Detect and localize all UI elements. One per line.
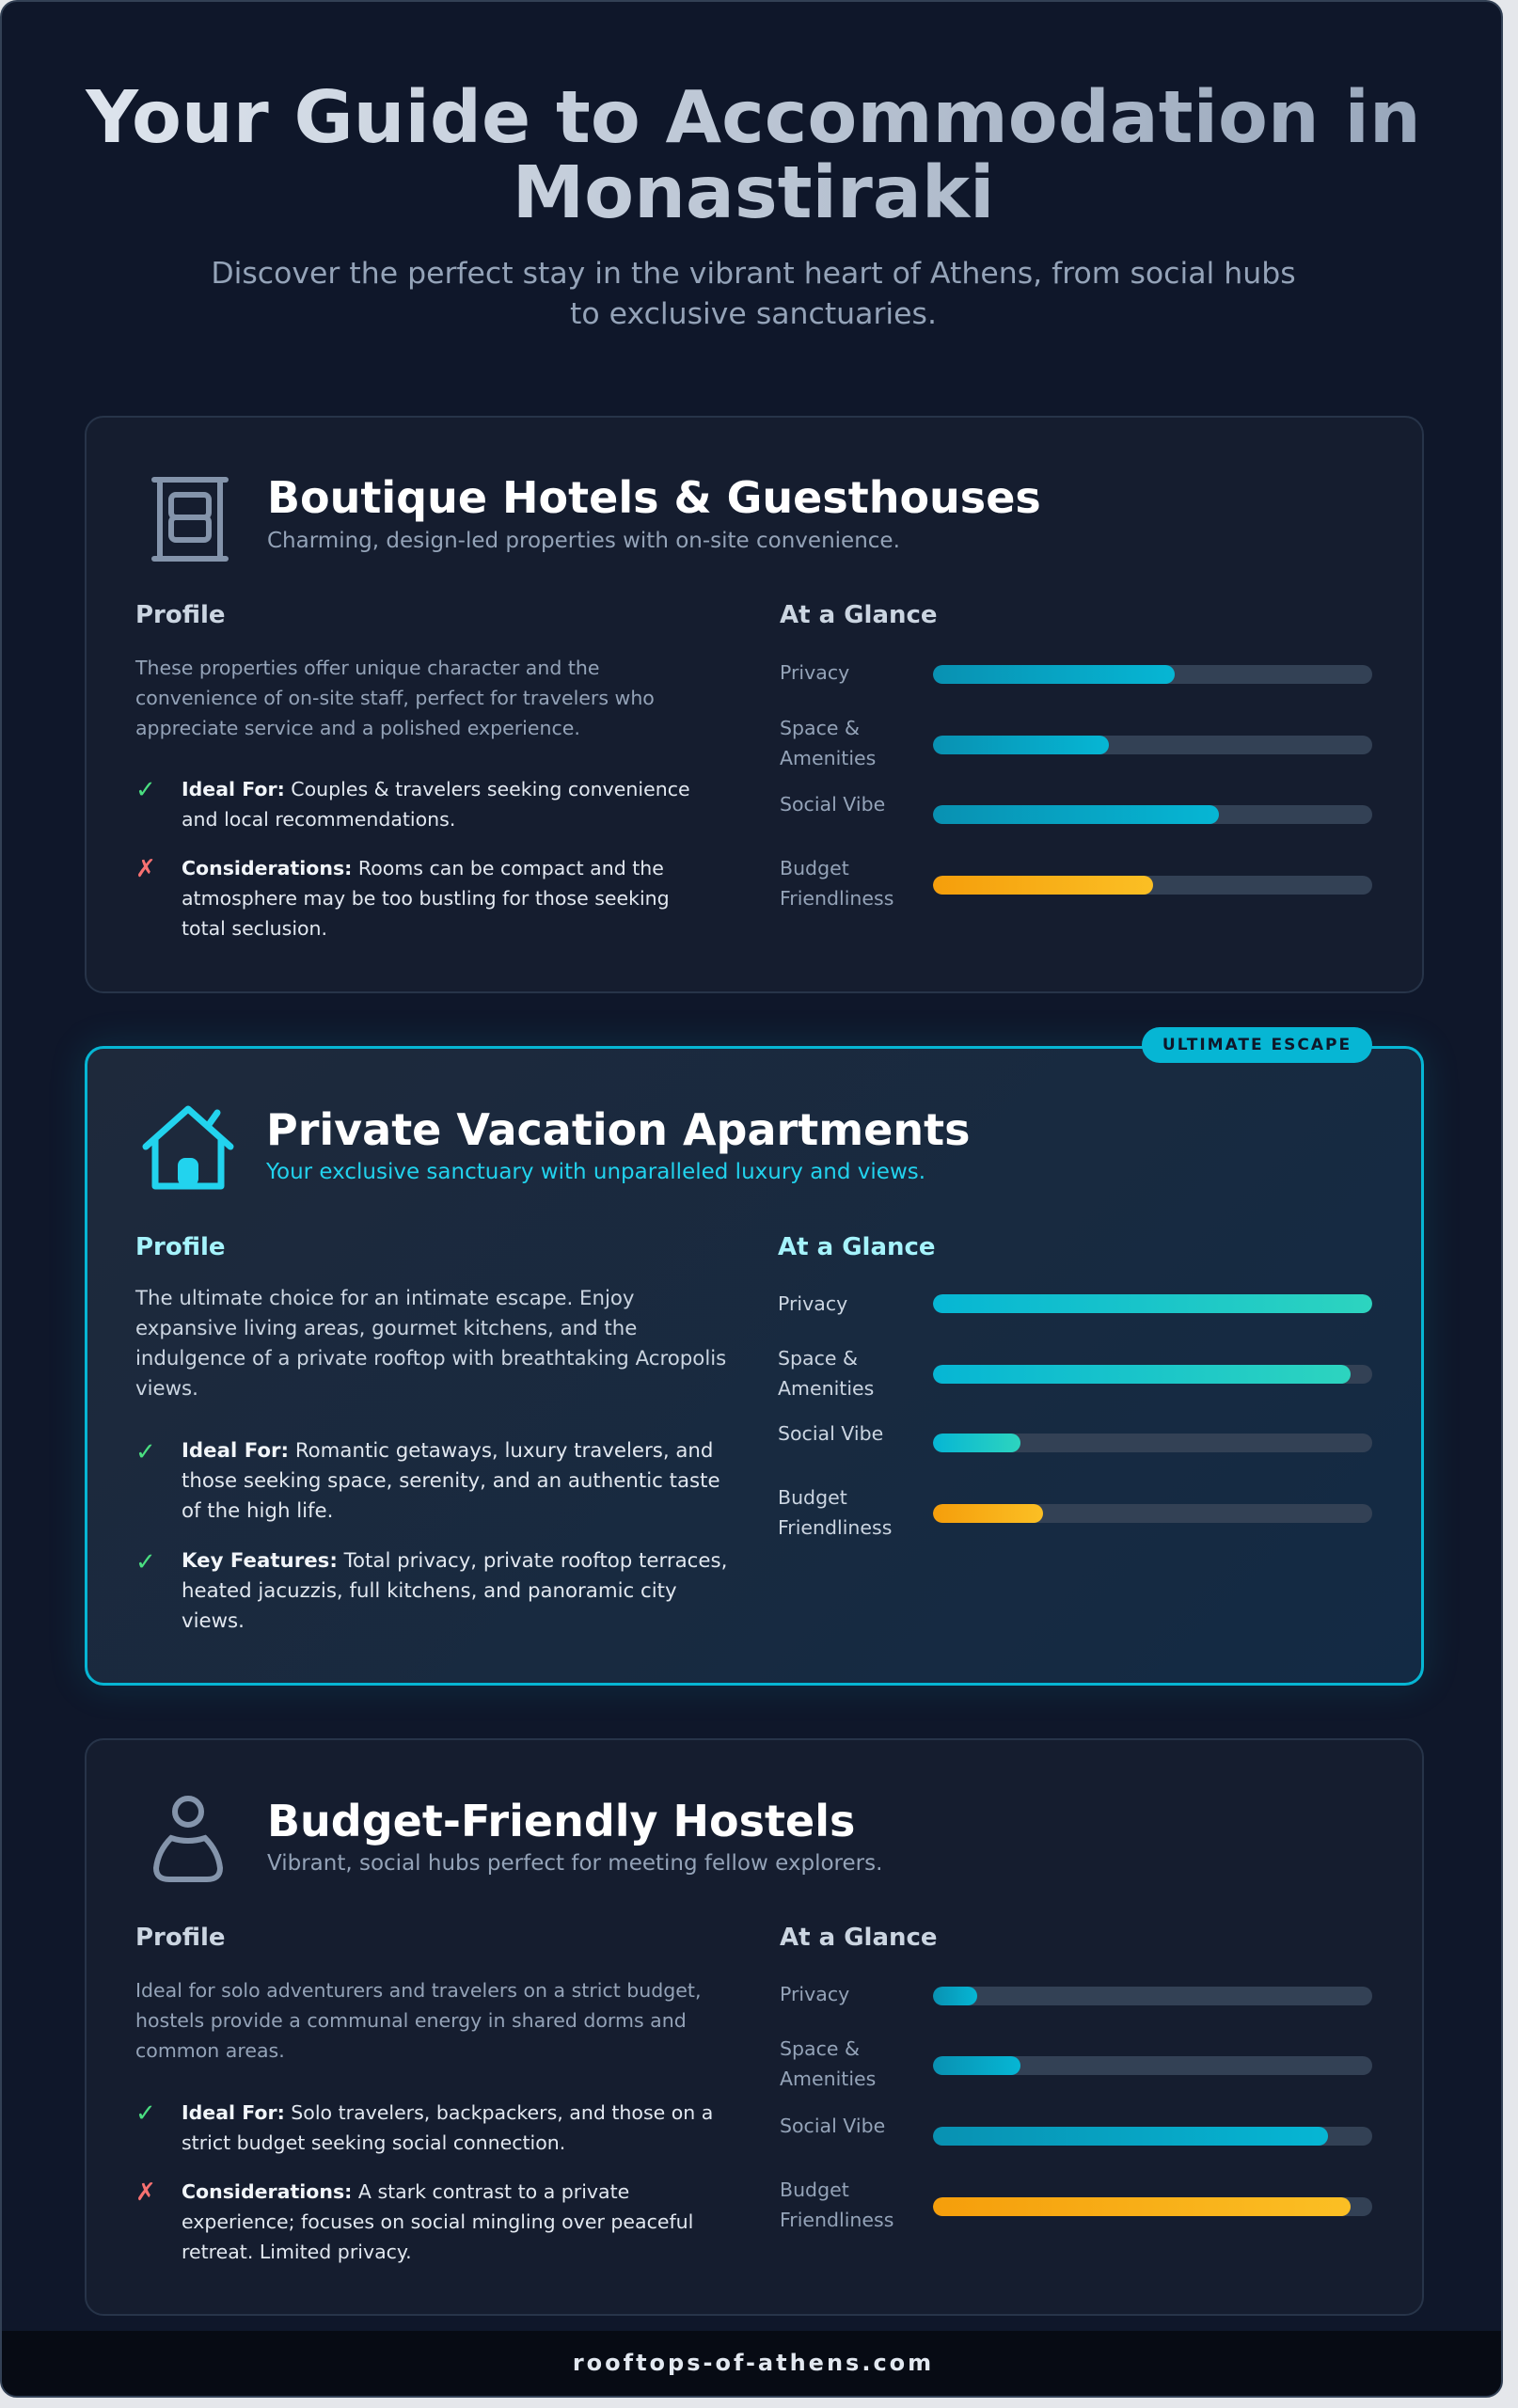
- ideal for: Ideal For: Solo travelers, backpackers, and those on a strict budget seeking social connection.: [182, 2101, 713, 2154]
- bar chart: Privacy: [780, 1983, 849, 2005]
- bar chart: Budget Friendliness: [780, 2178, 893, 2231]
- panel: private apartments: [85, 1046, 1424, 1686]
- bar chart: Social Vibe: [780, 793, 885, 816]
- icon: check: ✓: [135, 2099, 156, 2128]
- subheading: Your exclusive sanctuary with unparalleled luxury and views.: [266, 1160, 925, 1184]
- icon: person: [153, 1796, 223, 1882]
- panel: boutique hotels: [85, 416, 1424, 993]
- badge: ultimate escape: [1142, 1027, 1372, 1063]
- profile heading: Profile: [135, 1233, 226, 1261]
- title: Monastiraki: [513, 151, 994, 235]
- icon: check: ✓: [135, 776, 156, 804]
- icon: building: [151, 477, 229, 562]
- considerations: Considerations: A stark contrast to a private experience; focuses on social mingling over peaceful retreat. Limited privacy.: [182, 2180, 693, 2263]
- bar chart: Space & Amenities: [780, 2037, 876, 2090]
- at a glance heading: At a Glance: [780, 1924, 938, 1952]
- bar chart: Budget Friendliness: [780, 857, 893, 910]
- heading: Private Vacation Apartments: [266, 1104, 970, 1155]
- profile text: The ultimate choice for an intimate escape. Enjoy expansive living areas, gourmet kitchens, and the indulgence of a private rooftop with breathtaking Acropolis views.: [135, 1287, 726, 1401]
- subheading: Charming, design-led properties with on-site convenience.: [267, 529, 900, 553]
- bar chart: [780, 1983, 1372, 2231]
- icon: check: ✓: [135, 1438, 156, 1466]
- icon: check: ✓: [135, 1548, 156, 1576]
- profile heading: Profile: [135, 1924, 226, 1952]
- bar chart: Budget Friendliness: [778, 1486, 892, 1539]
- bar chart: Space & Amenities: [778, 1347, 874, 1400]
- considerations: Considerations: Rooms can be compact and the atmosphere may be too bustling for those seeking total seclusion.: [182, 857, 670, 940]
- bar chart: Social Vibe: [778, 1422, 883, 1445]
- bar chart: Privacy: [780, 661, 849, 684]
- at a glance heading: At a Glance: [780, 601, 938, 629]
- subtitle: Discover the perfect stay in the vibrant heart of Athens, from social hubs to exclusive sanctuaries.: [211, 257, 1296, 331]
- icon: cross: ✗: [135, 855, 156, 883]
- title: [2, 81, 1505, 231]
- profile text: These properties offer unique character and the convenience of on-site staff, perfect for travelers who appreciate service and a polished experience.: [135, 657, 655, 739]
- badge: ultimate escape: ULTIMATE ESCAPE: [1162, 1036, 1352, 1054]
- bar chart: [778, 1292, 1372, 1539]
- footer: rooftops-of-athens.com: [573, 2350, 934, 2376]
- ideal for: Ideal For: Couples & travelers seeking convenience and local recommendations.: [182, 778, 690, 831]
- icon: cross: ✗: [135, 2178, 156, 2207]
- profile heading: Profile: [135, 601, 226, 629]
- footer: [2, 2331, 1505, 2401]
- bar chart: Social Vibe: [780, 2115, 885, 2137]
- profile text: Ideal for solo adventurers and travelers on a strict budget, hostels provide a communal energy in shared dorms and common areas.: [135, 1979, 701, 2062]
- bar chart: [780, 661, 1372, 910]
- panel: budget hostels: [85, 1738, 1424, 2316]
- ideal for: Ideal For: Romantic getaways, luxury travelers, and those seeking space, serenity, and an authentic taste of the high life.: [182, 1439, 720, 1523]
- heading: Budget-Friendly Hostels: [267, 1796, 855, 1846]
- at a glance heading: At a Glance: [778, 1233, 936, 1261]
- heading: Boutique Hotels & Guesthouses: [267, 472, 1041, 523]
- title: Your Guide to Accommodation in: [86, 76, 1421, 160]
- subheading: Vibrant, social hubs perfect for meeting fellow explorers.: [267, 1851, 882, 1876]
- key features: Key Features: Total privacy, private rooftop terraces, heated jacuzzis, full kitchens, and panoramic city views.: [182, 1549, 727, 1633]
- bar chart: Privacy: [778, 1292, 847, 1315]
- icon: house: [143, 1106, 233, 1189]
- bar chart: Space & Amenities: [780, 717, 876, 769]
